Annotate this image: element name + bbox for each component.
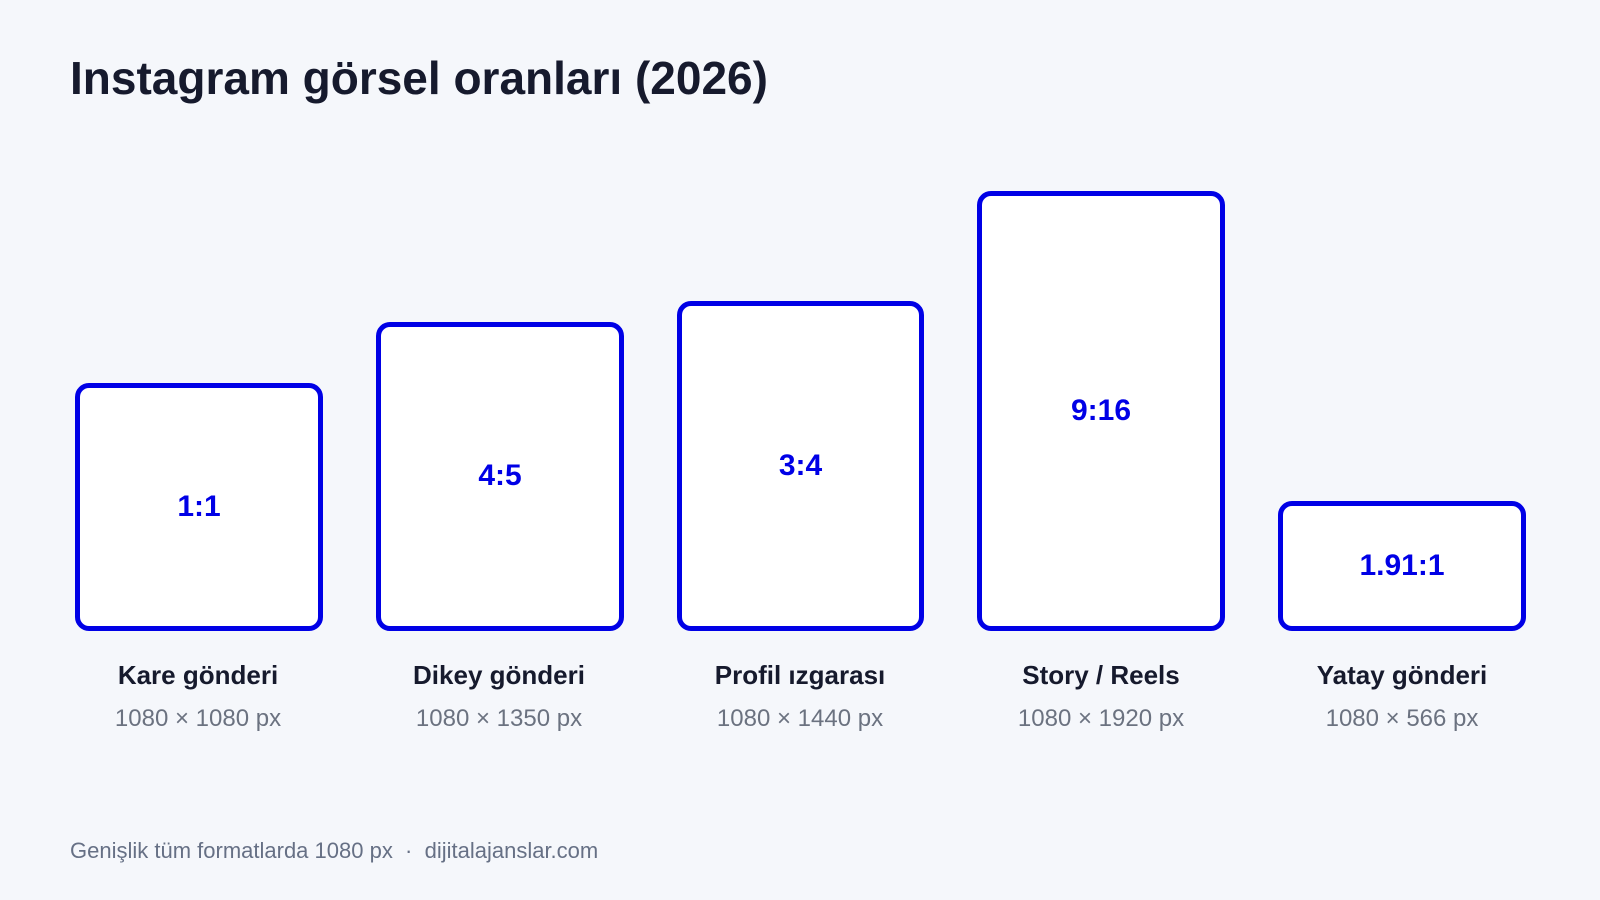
- label: Dikey gönderi: Dikey gönderi: [413, 660, 585, 690]
- label: Profil ızgarası: [715, 660, 885, 732]
- label: Yatay gönderi: [1317, 660, 1487, 732]
- frame: 1:1: 1:1: [177, 490, 221, 522]
- label: Profil ızgarası: 1080 × 1440 px: [717, 705, 883, 732]
- title: Instagram görsel oranları (2026): [70, 52, 768, 104]
- frame: 4:5: [376, 322, 624, 631]
- label: Kare gönderi: Kare gönderi: [118, 660, 278, 690]
- label: Dikey gönderi: [413, 660, 585, 732]
- frame: 3:4: [677, 301, 924, 631]
- label: Dikey gönderi: 1080 × 1350 px: [416, 705, 582, 732]
- label: Yatay gönderi: Yatay gönderi: [1317, 660, 1487, 690]
- frame: 9:16: 9:16: [1071, 394, 1131, 426]
- frame: 1:1: [75, 383, 323, 631]
- label: Kare gönderi: 1080 × 1080 px: [115, 705, 281, 732]
- frame: 9:16: [977, 191, 1225, 631]
- frame: 4:5: 4:5: [478, 459, 522, 492]
- label: Story / Reels: Story / Reels: [1022, 660, 1180, 690]
- label: Yatay gönderi: 1080 × 566 px: [1326, 705, 1478, 732]
- footer note: Genişlik tüm formatlarda 1080 px · dijitalajanslar.com: [70, 838, 598, 863]
- label: Story / Reels: [1018, 660, 1184, 732]
- frame: 1.91:1: [1278, 501, 1526, 631]
- label: Story / Reels: 1080 × 1920 px: [1018, 705, 1184, 732]
- label: Profil ızgarası: Profil ızgarası: [715, 660, 885, 690]
- frame: 3:4: 3:4: [779, 448, 822, 482]
- frame: 1.91:1: 1.91:1: [1359, 548, 1445, 582]
- label: Kare gönderi: [115, 660, 281, 732]
